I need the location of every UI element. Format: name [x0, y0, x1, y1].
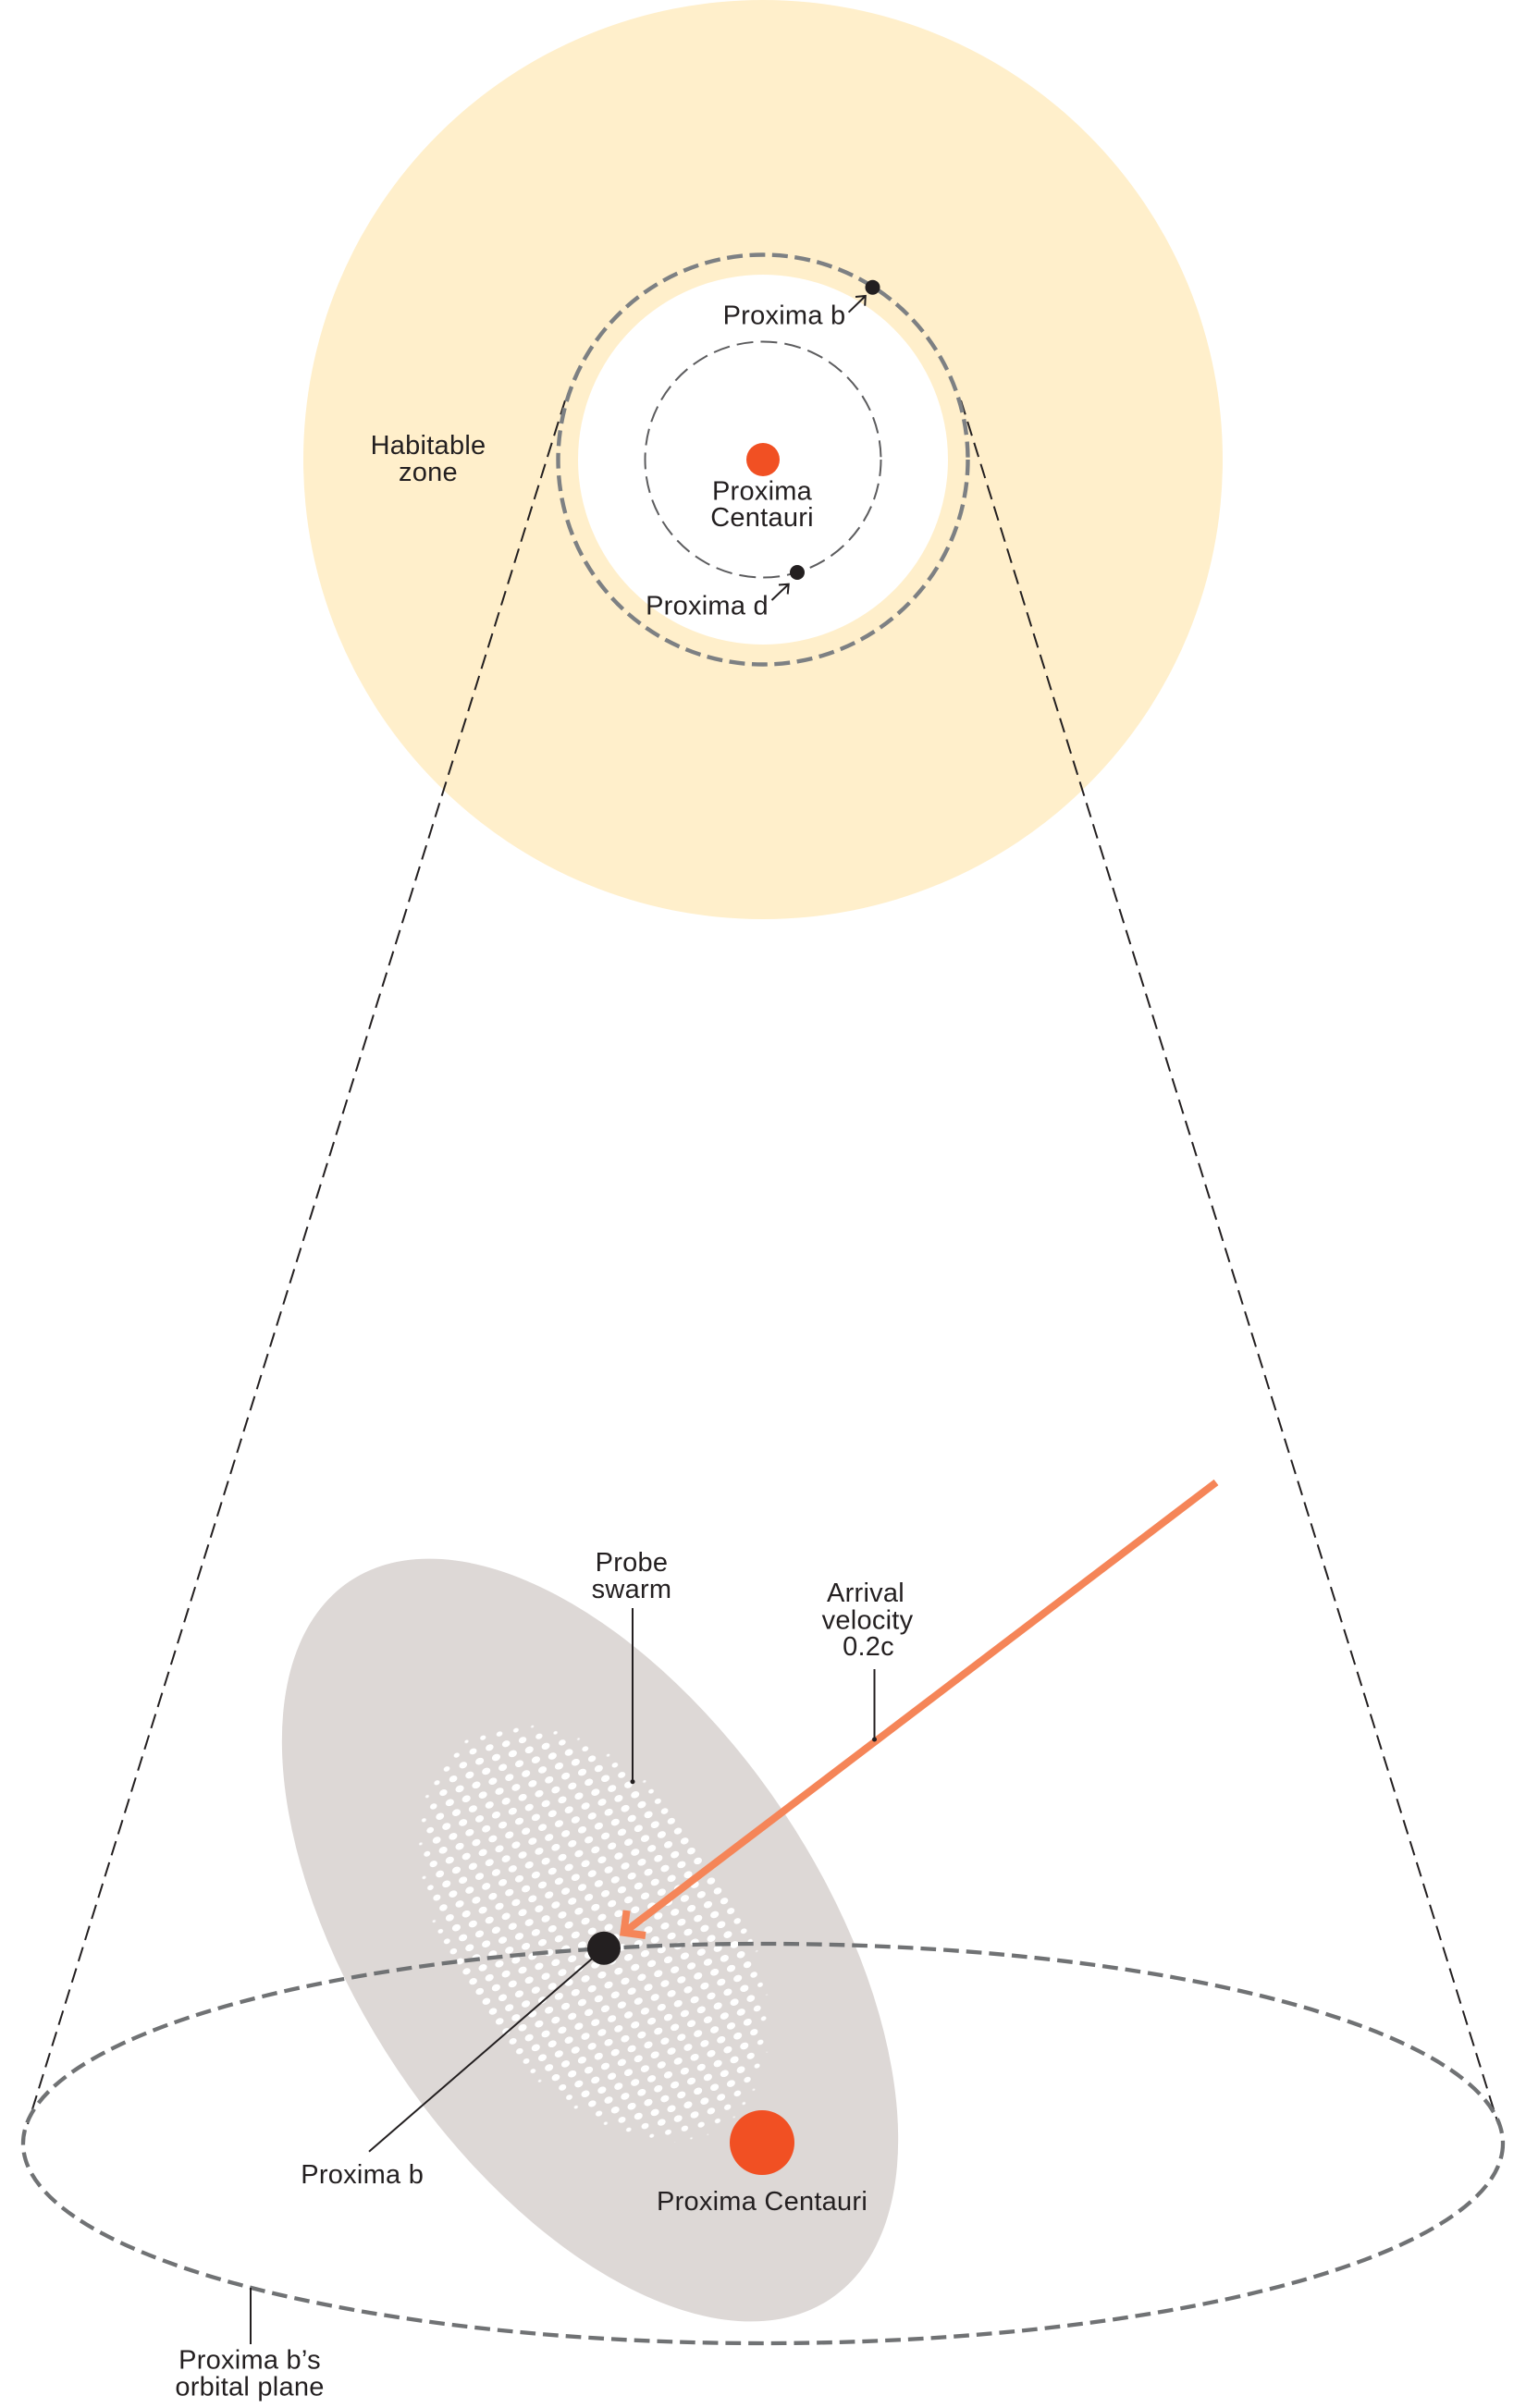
label: Proxima d: Proxima d: [646, 592, 769, 621]
habitable zone disc: [303, 0, 1223, 919]
panel: probe arrival diagram: [23, 1452, 1503, 2408]
label: Proxima Centauri: Centauri: [710, 503, 814, 533]
inner non-habitable region: [578, 275, 948, 645]
label: Proxima b's orbital plane: orbital plane: [175, 2373, 325, 2402]
label: Arrival velocity 0.2c: velocity: [822, 1606, 914, 1636]
arrow: arrival velocity: [623, 1482, 1216, 1935]
label: Proxima b's orbital plane: Proxima b’s: [178, 2346, 321, 2376]
leader: Arrival velocity: [872, 1669, 877, 1742]
probe swarm dot field: [419, 1726, 768, 2143]
planet: Proxima b: [866, 280, 880, 295]
cone edge: right: [961, 400, 1498, 2124]
orbital plane of Proxima b: [23, 1944, 1503, 2343]
label: Proxima b: Proxima b: [723, 301, 845, 331]
label: Arrival velocity 0.2c: Arrival: [827, 1579, 905, 1608]
label: Habitable zone: zone: [399, 458, 458, 487]
star: Proxima Centauri: [730, 2110, 794, 2175]
label: Proxima Centauri: Proxima: [712, 477, 813, 507]
leader: Proxima b: [369, 1948, 604, 2152]
orbit of Proxima b: [559, 255, 967, 664]
star: Proxima Centauri: [746, 443, 780, 476]
planet: Proxima d: [790, 565, 805, 580]
cone edge: left: [28, 400, 565, 2124]
label: Probe swarm: Probe: [596, 1548, 668, 1578]
planet: Proxima b: [587, 1932, 621, 1965]
arrow: Proxima b pointer: [849, 296, 866, 313]
label: Probe swarm: swarm: [592, 1575, 671, 1604]
arrow: Proxima d pointer: [771, 584, 789, 600]
label: Arrival velocity 0.2c: 0.2c: [843, 1632, 894, 1662]
label: Proxima Centauri: Proxima Centauri: [657, 2187, 868, 2217]
leader: Probe swarm: [631, 1608, 634, 1784]
leader: orbital plane: [250, 2288, 252, 2344]
orbit of Proxima d: [646, 342, 880, 577]
grey region of approach: [157, 1452, 1023, 2408]
label: Proxima b: Proxima b: [301, 2160, 424, 2190]
label: Habitable zone: Habitable: [371, 431, 486, 461]
